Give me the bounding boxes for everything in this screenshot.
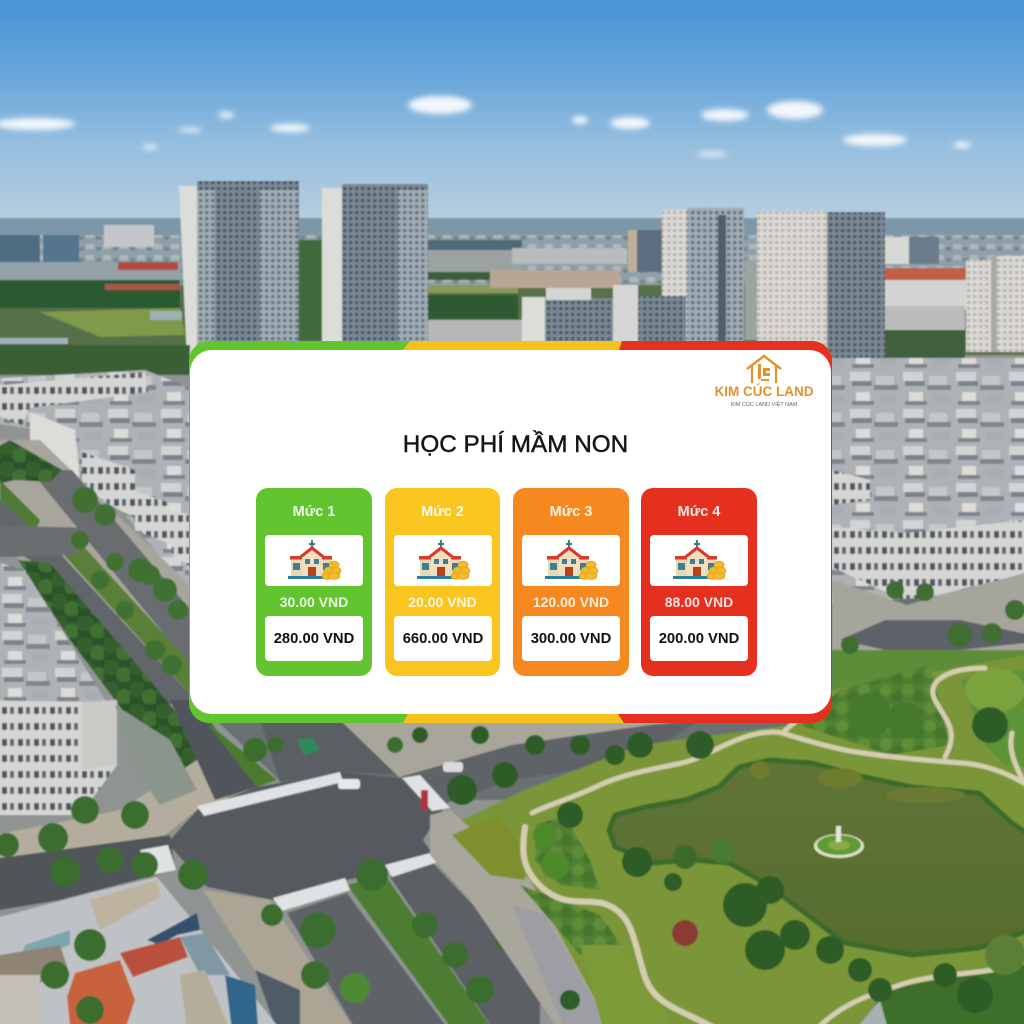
- card white panel: [190, 350, 831, 714]
- tree rows: [18, 560, 210, 785]
- band: yellow segment: [403, 341, 624, 723]
- fee low: 88.00 VND: [665, 594, 733, 610]
- fee high: [394, 616, 492, 661]
- fee high: 280.00 VND: [274, 631, 354, 647]
- title: HỌC PHÍ MẦM NON: [403, 431, 628, 458]
- bottom left buildings: [0, 877, 300, 1024]
- lower left sidewalk and road: [0, 760, 230, 880]
- panel: Mức 4: [641, 488, 757, 676]
- panel: Mức 3: [513, 488, 629, 676]
- left block of townhouses: [0, 345, 195, 600]
- crossing road: [0, 525, 95, 558]
- street trees: [0, 737, 515, 1024]
- fee high: 200.00 VND: [659, 631, 739, 647]
- icon: school with coins: [522, 535, 620, 586]
- road B: [0, 495, 195, 705]
- icon: school with coins: [650, 535, 748, 586]
- lake: [609, 760, 1024, 955]
- panel: Mức 1: [256, 488, 372, 676]
- left lower apartment block: [0, 555, 117, 815]
- median and upper trees: [0, 440, 62, 490]
- median south: [347, 875, 510, 1024]
- fee low: 120.00 VND: [533, 594, 609, 610]
- pavement left of card: [0, 440, 195, 720]
- crosswalks: [140, 772, 450, 911]
- fee high: [265, 616, 363, 661]
- logo: Kim Cúc Land: [714, 354, 814, 408]
- distant city: [0, 218, 1024, 360]
- clouds: [0, 96, 971, 156]
- park: [430, 650, 1024, 1024]
- icon: house logo: [746, 354, 782, 383]
- right street block: [832, 565, 1024, 780]
- road A: [30, 470, 195, 672]
- fee high: 660.00 VND: [403, 631, 483, 647]
- towers: [179, 181, 1024, 362]
- vehicles: [297, 737, 320, 755]
- tier name: Mức 3: [550, 504, 592, 520]
- logo name: KIM CÚC LAND: [714, 384, 814, 399]
- fee low: 30.00 VND: [280, 594, 348, 610]
- sky: [0, 0, 1024, 225]
- card frame with tri-colour band: [189, 341, 832, 723]
- tier name: Mức 2: [421, 504, 464, 520]
- fee low: 20.00 VND: [408, 594, 477, 610]
- intersection: [167, 772, 447, 900]
- fee high: 300.00 VND: [531, 631, 611, 647]
- panel: Mức 2: [385, 488, 500, 676]
- right townhouses: [830, 358, 1024, 603]
- fee high: [650, 616, 748, 661]
- park paths: [523, 668, 1024, 1024]
- fee high: [522, 616, 620, 661]
- logo tagline: KIM CÚC LAND VIỆT NAM: [731, 402, 797, 408]
- icon: school with coins: [394, 535, 492, 586]
- pavement south: [203, 890, 370, 1024]
- lower ground base: [195, 590, 1024, 800]
- icon: school with coins: [265, 535, 363, 586]
- park trees: [412, 693, 1024, 1013]
- tier name: Mức 1: [293, 504, 335, 520]
- tier name: Mức 4: [678, 504, 720, 520]
- band: red segment: [618, 341, 832, 723]
